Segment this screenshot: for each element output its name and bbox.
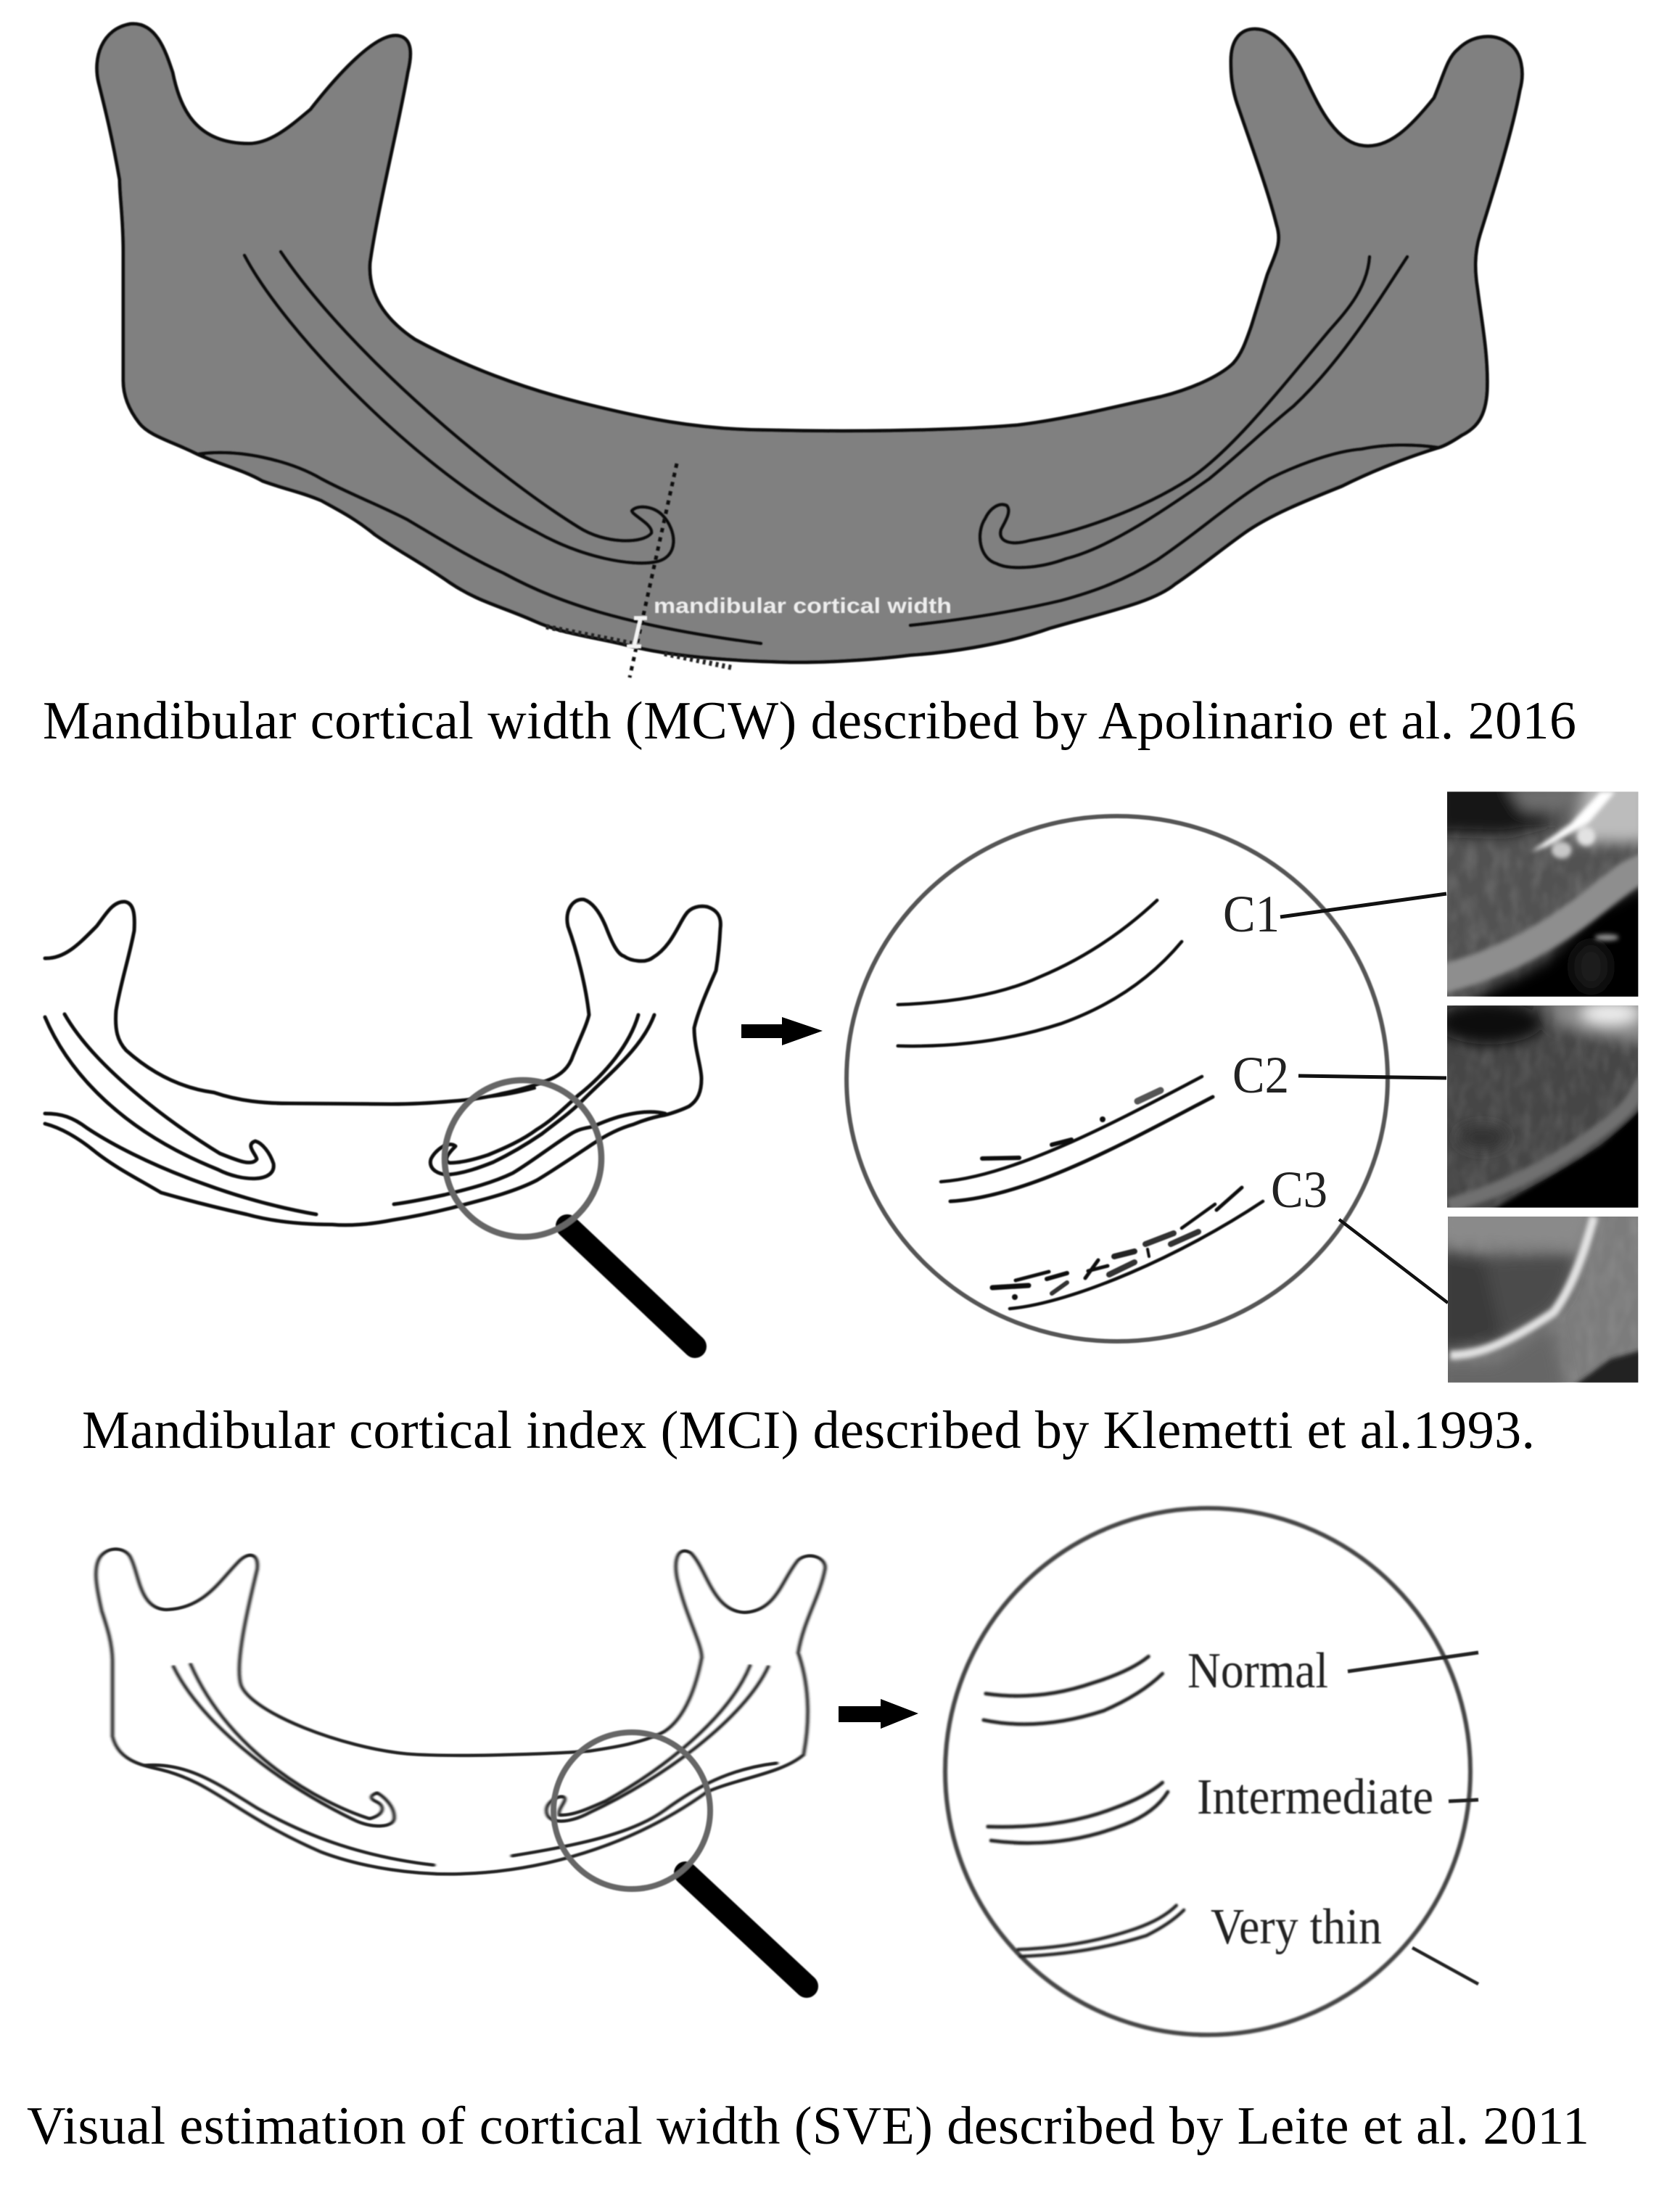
right canal	[546, 1666, 768, 1821]
caption: SVE: Visual estimation of cortical width (SVE) described by Leite et al. 2011	[27, 2096, 1589, 2156]
panel: mandibular cortical index	[45, 776, 1652, 1398]
intermediate lower	[991, 1792, 1168, 1843]
radiograph C1	[1447, 791, 1638, 997]
normal	[986, 1656, 1148, 1696]
left inner cortical line	[45, 1114, 316, 1214]
jaw diagram: grey mandible	[97, 24, 1522, 662]
right inner cortical line	[394, 1112, 665, 1204]
right canal	[430, 1015, 654, 1174]
leader line C3	[1339, 1219, 1448, 1303]
very thin lower	[1020, 1910, 1184, 1956]
magnifier lens	[445, 1080, 601, 1237]
panel: mandibular cortical width	[97, 24, 1522, 678]
C1 cortical lines	[898, 900, 1182, 1046]
magnifier	[553, 1732, 807, 1986]
mandible outline	[45, 900, 720, 1225]
dotted tangent line left	[546, 627, 632, 643]
magnifier	[445, 1080, 695, 1346]
leader line intermediate	[1449, 1800, 1478, 1801]
label: Intermediate: Intermediate	[1197, 1769, 1433, 1825]
C2 cortical lines	[941, 1077, 1213, 1201]
caption: MCW: Mandibular cortical width (MCW) described by Apolinario et al. 2016	[43, 691, 1576, 751]
mandible outline	[96, 1549, 825, 1874]
arrow	[741, 1017, 823, 1045]
leader line very thin	[1412, 1948, 1478, 1984]
right inner cortical line	[512, 1763, 777, 1856]
radiograph C3	[1448, 1217, 1638, 1383]
jaw diagram: outline mandible	[45, 900, 720, 1225]
magnifier handle	[567, 1226, 695, 1346]
label: Very thin: Very thin	[1211, 1899, 1382, 1955]
circle outline	[945, 1508, 1470, 2035]
dotted tangent line right	[664, 654, 734, 668]
left canal	[173, 1664, 395, 1826]
right inner cortical line	[910, 445, 1438, 625]
right mandibular canal	[980, 257, 1407, 567]
panel: visual estimation	[96, 1508, 1478, 2035]
label: C2: C2	[1232, 1046, 1289, 1104]
white width marker	[627, 618, 647, 646]
dotted perpendicular line	[630, 464, 677, 678]
label: Normal: Normal	[1187, 1643, 1328, 1699]
zoom circle	[945, 1508, 1470, 2035]
intermediate	[988, 1782, 1163, 1827]
label: mandibular cortical width: mandibular cortical width	[654, 594, 952, 618]
C3 cortical lines	[992, 1188, 1263, 1309]
left canal	[45, 1014, 273, 1179]
left inner cortical line	[144, 1765, 434, 1865]
very thin	[1018, 1906, 1177, 1949]
short notch line	[488, 1088, 535, 1097]
zoom circle	[847, 816, 1388, 1341]
jaw diagram: thin outline mandible	[96, 1549, 825, 1874]
mandible outline	[97, 24, 1522, 662]
circle outline	[847, 816, 1388, 1341]
arrow	[839, 1699, 918, 1729]
normal lower	[984, 1674, 1163, 1724]
leader line normal	[1348, 1653, 1478, 1671]
leader line C2	[1298, 1076, 1446, 1078]
leader line C1	[1280, 894, 1446, 917]
label: C1: C1	[1223, 885, 1280, 943]
magnifier handle	[685, 1873, 807, 1986]
caption: MCI: Mandibular cortical index (MCI) described by Klemetti et al.1993.	[82, 1401, 1535, 1460]
cortical lines	[984, 1656, 1184, 1956]
measurement marks	[546, 464, 952, 678]
left inner cortical line	[198, 453, 761, 643]
radiograph C2	[1447, 1005, 1638, 1208]
magnifier lens	[553, 1732, 710, 1889]
labels and leaders	[1187, 1643, 1478, 1984]
left mandibular canal	[244, 252, 673, 563]
label: C3: C3	[1271, 1161, 1327, 1219]
